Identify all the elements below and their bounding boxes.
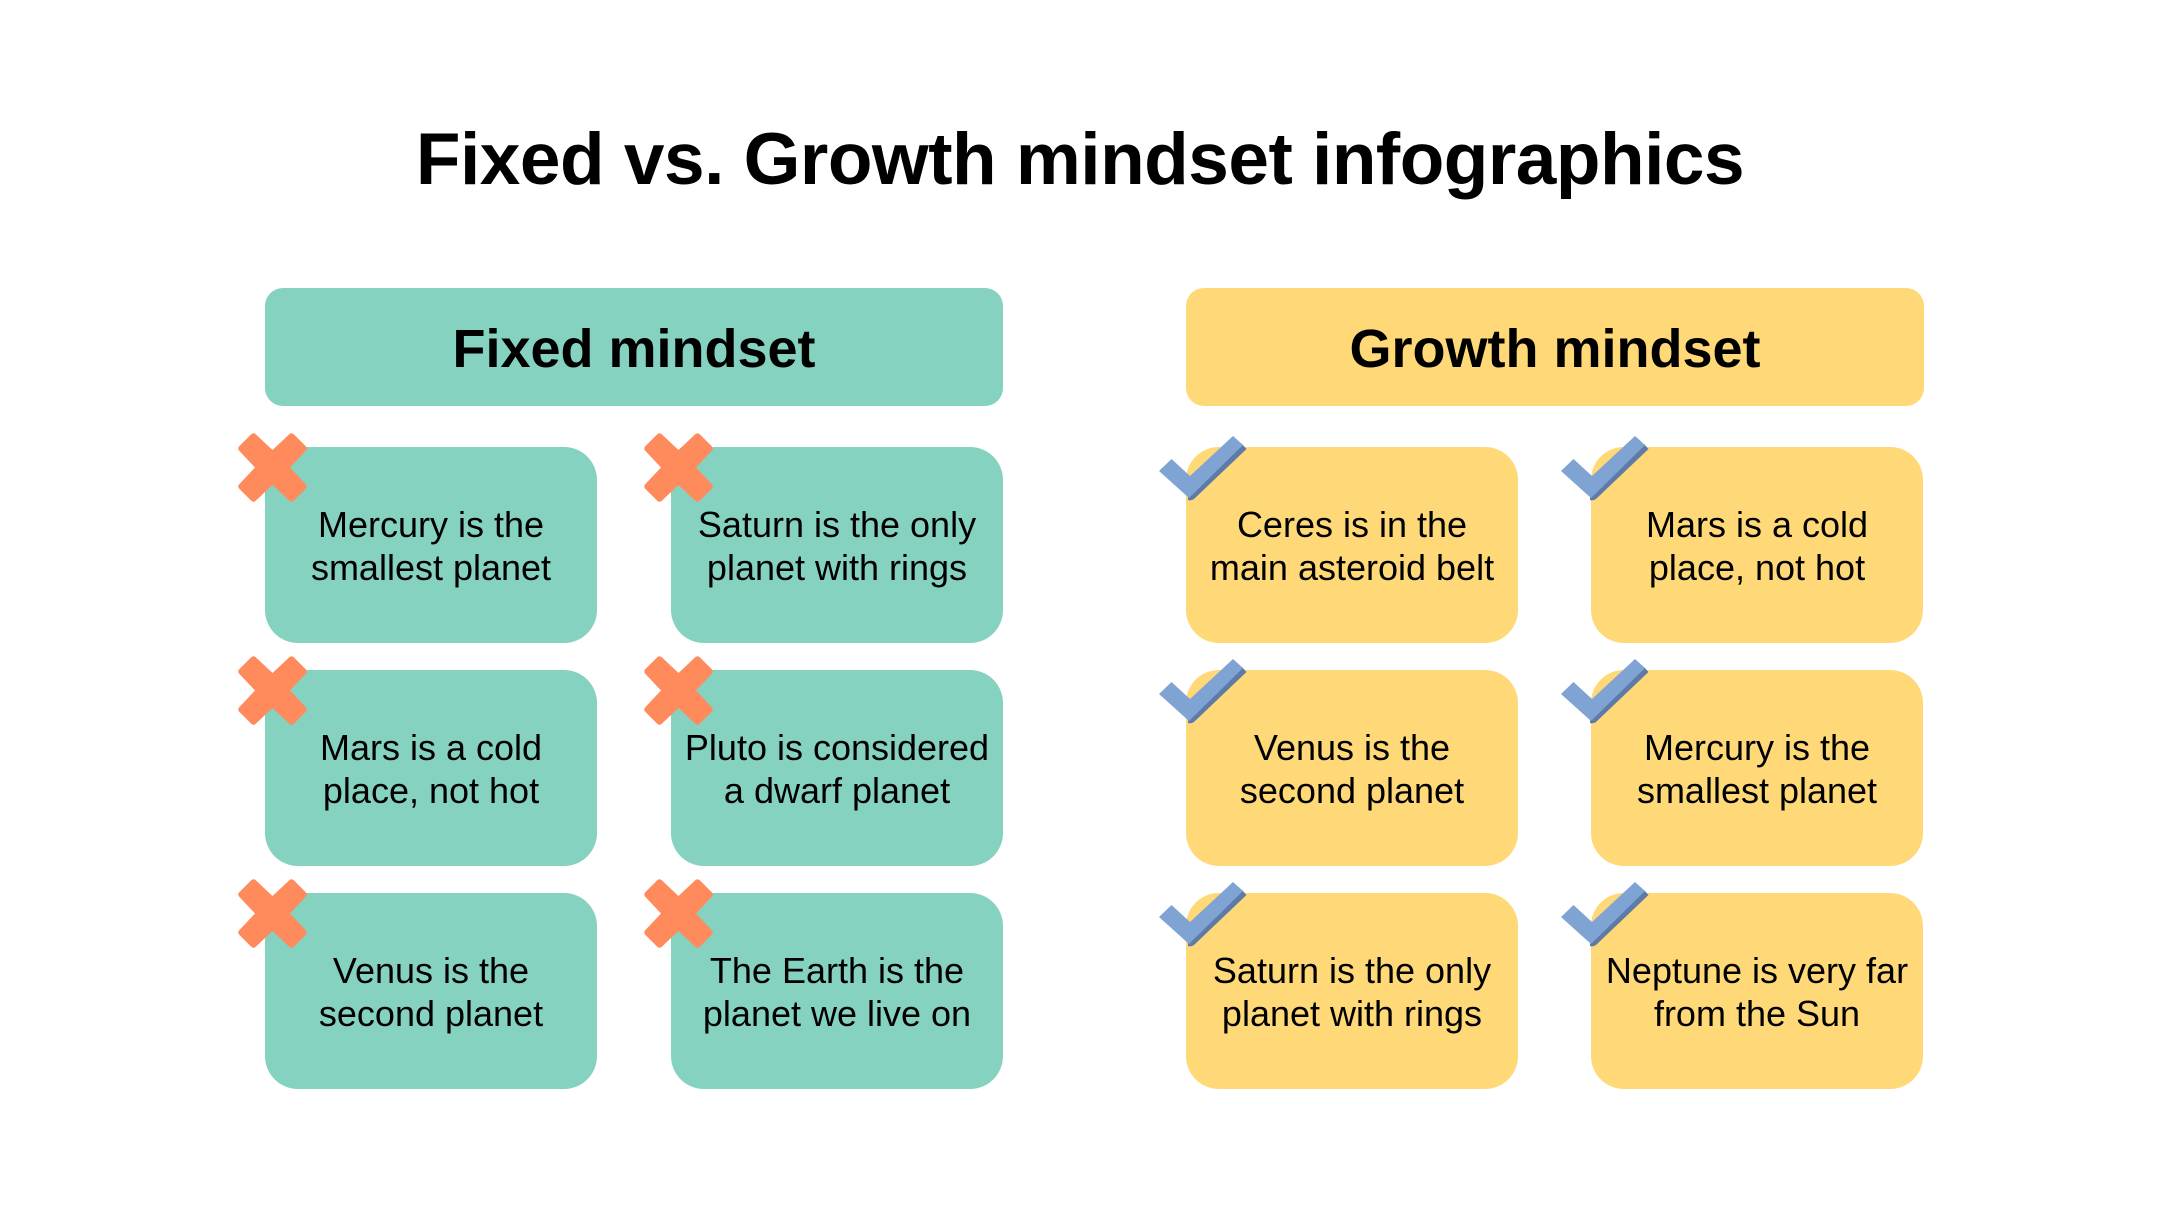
card: Saturn: planet with rings <box>707 547 967 588</box>
card: Saturn <box>671 447 1003 643</box>
card: Pluto: a dwarf planet <box>724 770 950 811</box>
card: Ceres: main asteroid belt <box>1210 547 1494 588</box>
card: Saturn: Saturn is the only <box>1213 950 1491 991</box>
card: Earth: planet we live on <box>703 993 971 1034</box>
card: Neptune: from the Sun <box>1654 993 1860 1034</box>
heading: growth mindset <box>1186 288 1924 406</box>
title: Fixed vs. Growth mindset infographics <box>416 119 1744 200</box>
card: Neptune <box>1591 893 1923 1089</box>
card: Pluto: Pluto is considered <box>685 727 989 768</box>
icon: cross 1 <box>238 433 307 502</box>
card: Venus: Venus is the <box>333 950 529 991</box>
icon: cross 3 <box>238 656 307 725</box>
card: Saturn <box>1186 893 1518 1089</box>
card: Mercury: Mercury is the <box>1644 727 1870 768</box>
card: Mars: place, not hot <box>323 770 539 811</box>
card: Pluto <box>671 670 1003 866</box>
heading: fixed mindset: Fixed mindset <box>452 319 816 379</box>
card: Mars: Mars is a cold <box>1646 504 1868 545</box>
icon: check 1 <box>1159 436 1246 500</box>
panel: fixed mindset <box>238 288 1003 1089</box>
card: Mars: Mars is a cold <box>320 727 542 768</box>
card: Mars <box>265 670 597 866</box>
card: Venus <box>1186 670 1518 866</box>
card: Saturn: planet with rings <box>1222 993 1482 1034</box>
card: Mercury <box>1591 670 1923 866</box>
card: Mars <box>1591 447 1923 643</box>
heading: fixed mindset <box>265 288 1003 406</box>
card: Mercury: smallest planet <box>1637 770 1877 811</box>
heading: growth mindset: Growth mindset <box>1349 319 1760 379</box>
panel: growth mindset <box>1159 288 1924 1089</box>
card: Mars: place, not hot <box>1649 547 1865 588</box>
card: Earth <box>671 893 1003 1089</box>
card: Mercury: smallest planet <box>311 547 551 588</box>
card: Earth: The Earth is the <box>710 950 964 991</box>
card: Mercury <box>265 447 597 643</box>
card: Neptune: Neptune is very far <box>1606 950 1908 991</box>
icon: cross 5 <box>238 879 307 948</box>
icon: check 4 <box>1561 659 1648 724</box>
icon: cross 4 <box>644 656 713 725</box>
card: Venus: second planet <box>1240 770 1464 811</box>
card: Venus <box>265 893 597 1089</box>
icon: check 3 <box>1159 659 1246 724</box>
card: Ceres <box>1186 447 1518 643</box>
icon: check 6 <box>1561 882 1648 946</box>
icon: check 5 <box>1159 882 1246 946</box>
icon: cross 6 <box>644 879 713 948</box>
icon: cross 2 <box>644 433 713 502</box>
card: Saturn: Saturn is the only <box>698 504 976 545</box>
card: Venus: second planet <box>319 993 543 1034</box>
card: Mercury: Mercury is the <box>318 504 544 545</box>
icon: check 2 <box>1561 436 1648 500</box>
card: Ceres: Ceres is in the <box>1237 504 1467 545</box>
card: Venus: Venus is the <box>1254 727 1450 768</box>
